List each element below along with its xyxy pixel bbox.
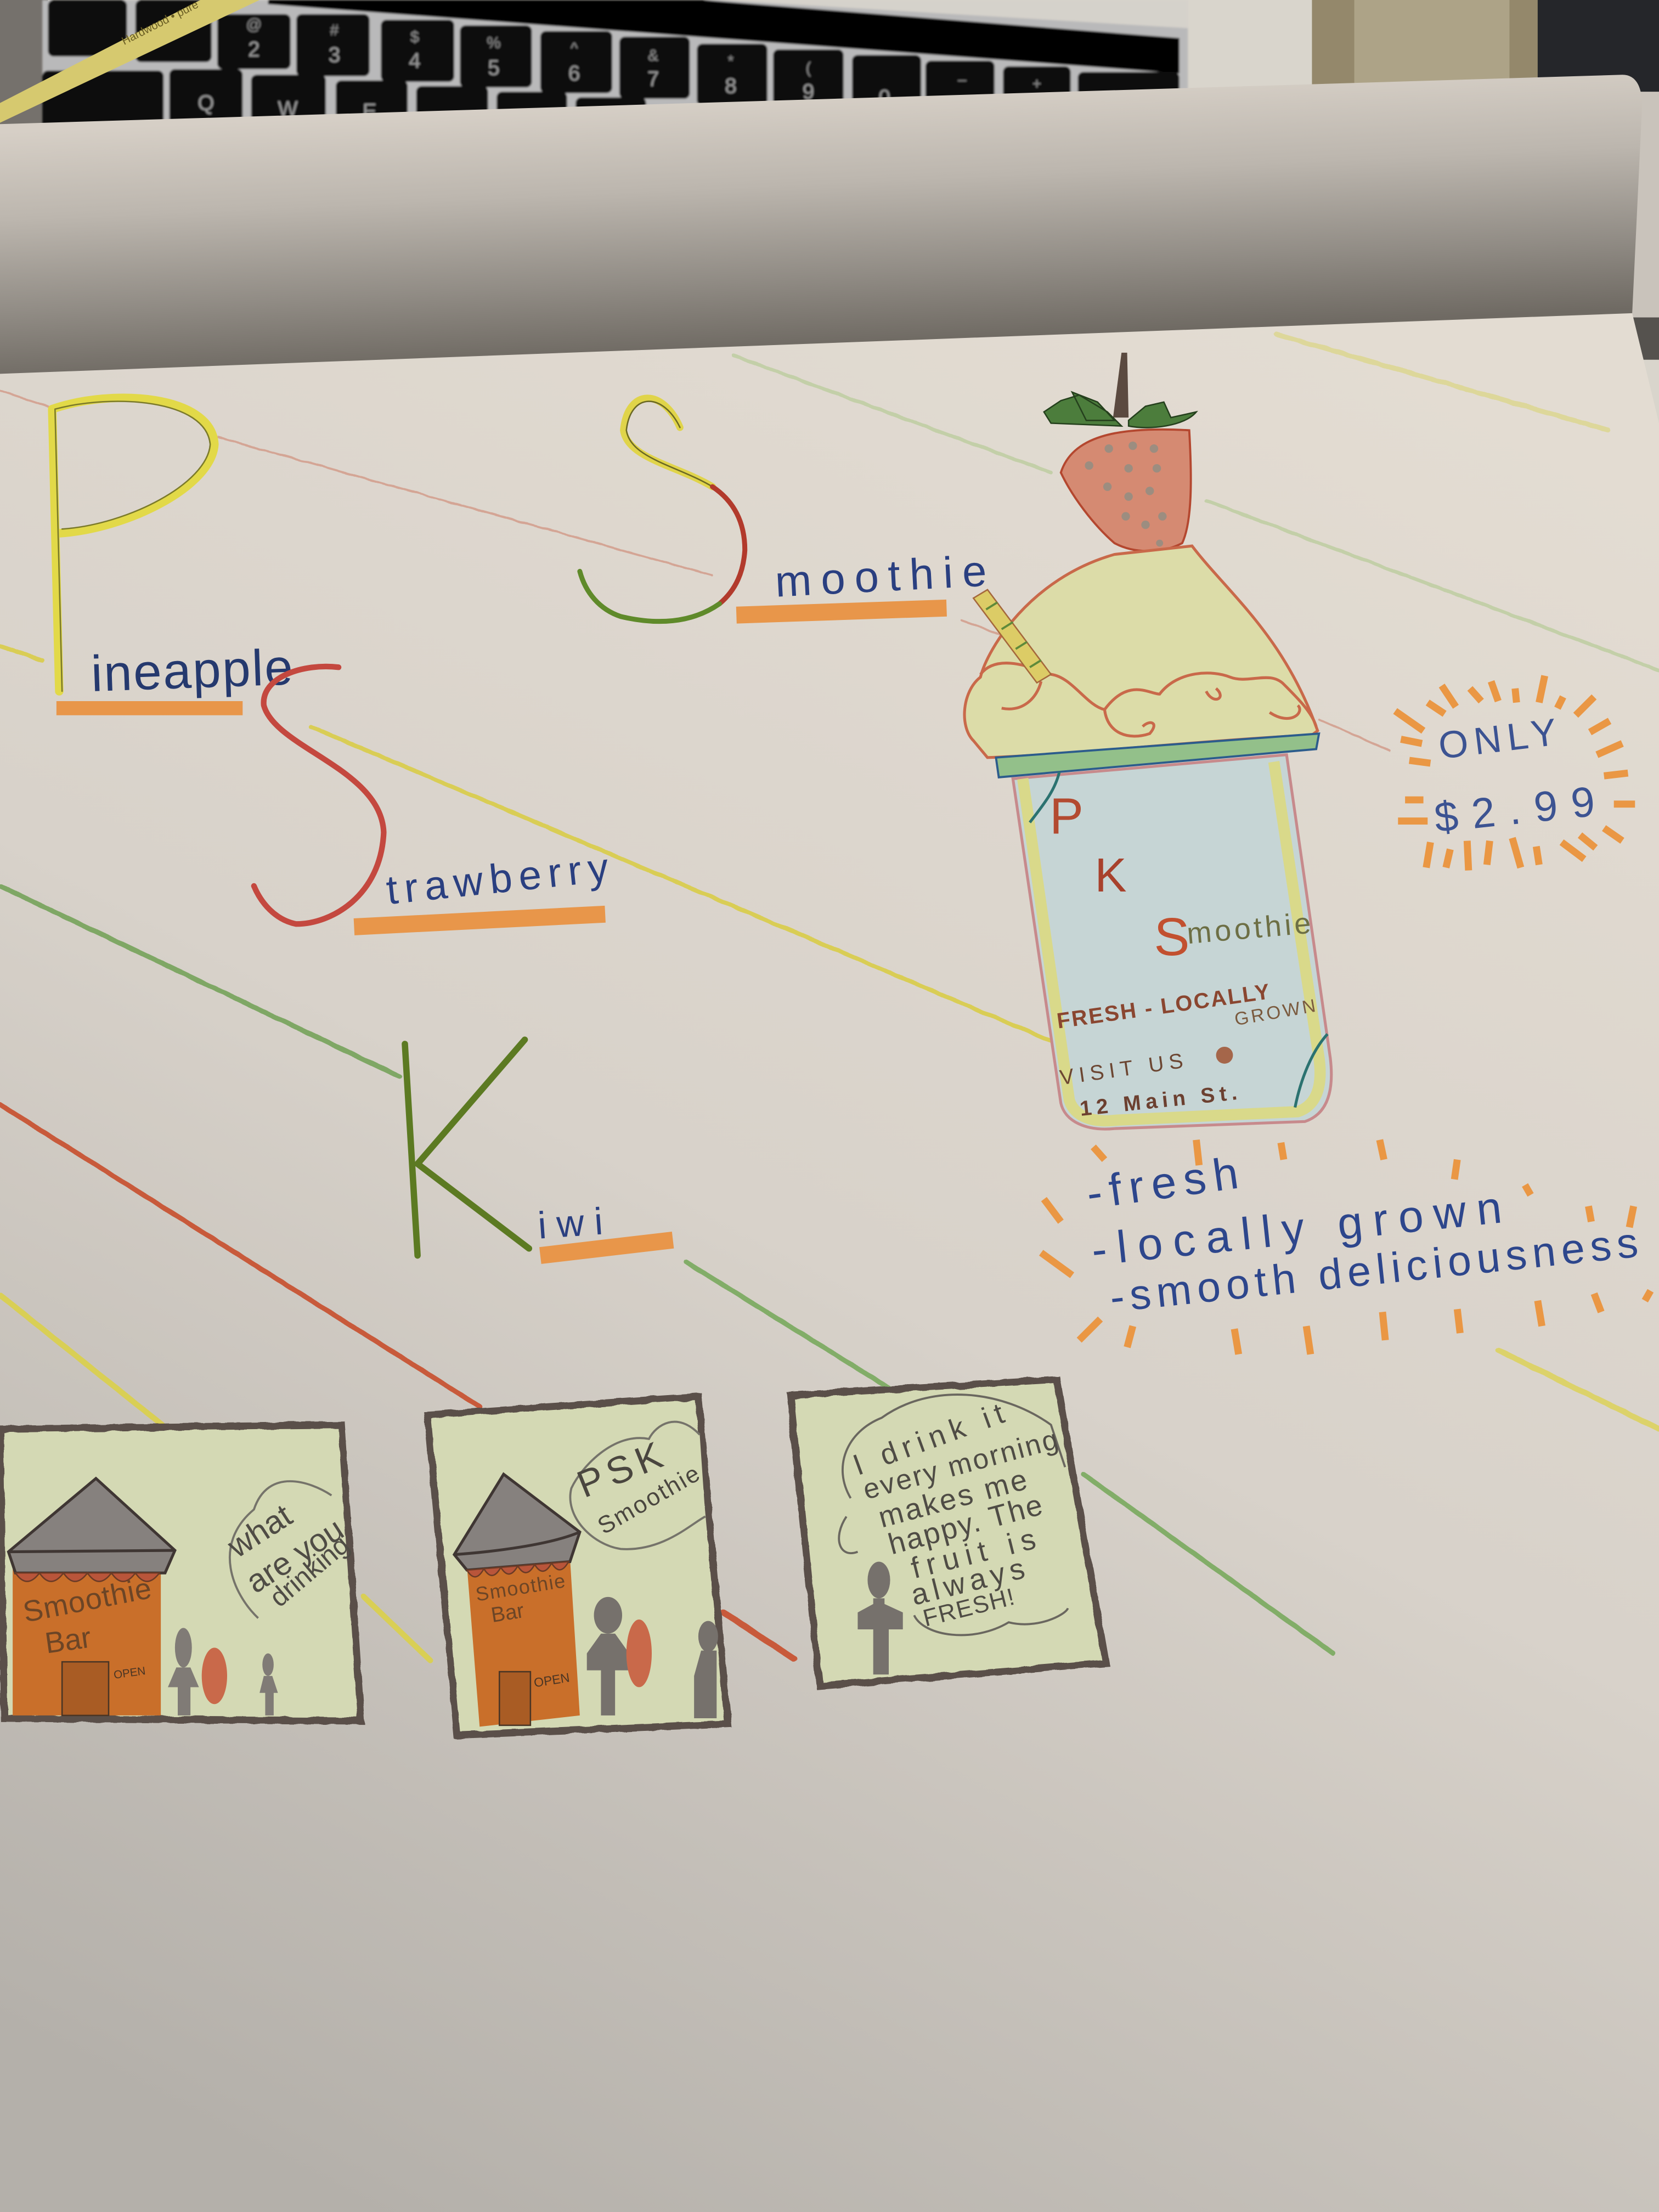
building [8, 1479, 175, 1716]
cup label letters: GROWN [1233, 996, 1317, 1030]
thought text: what [221, 1497, 298, 1565]
word: iwi: iwi [537, 1200, 604, 1247]
thought text Smoothie: Smoothie [593, 1460, 704, 1539]
feature list burst [1041, 1140, 1651, 1355]
laptop keyboard: 6 [568, 62, 580, 86]
laptop keyboard: + [1032, 75, 1041, 92]
rolled paper top [0, 75, 1642, 374]
orange underline [57, 706, 242, 711]
whipped cream swirl [980, 663, 1316, 736]
cup label letters [1049, 788, 1317, 1121]
building: Smoothie [20, 1572, 154, 1629]
list rays [1041, 1140, 1651, 1355]
letter P [52, 398, 215, 691]
orange underline [736, 608, 946, 615]
word: moothie: moothie [774, 546, 988, 606]
figure [857, 1562, 903, 1674]
laptop keyboard: & [648, 47, 658, 64]
speech text [849, 1397, 1061, 1632]
letter S [580, 398, 745, 622]
orange underline [540, 1240, 673, 1256]
thought text: drinking [264, 1530, 355, 1613]
heading letter S with word Smoothie [580, 398, 988, 622]
letter S [254, 667, 383, 924]
letter K [405, 1040, 529, 1256]
speech cloud [839, 1395, 1068, 1635]
price text amount: $2.99 [1432, 778, 1597, 842]
panel frame [427, 1397, 728, 1735]
word: trawberry: trawberry [384, 844, 611, 913]
laptop keyboard: # [330, 21, 339, 38]
cup body [1013, 755, 1331, 1129]
laptop keyboard: 2 [248, 38, 260, 61]
heading letter K with word Kiwi [405, 1040, 673, 1256]
figures [168, 1628, 278, 1716]
smoothie dome [964, 546, 1318, 758]
orange underline [354, 914, 605, 927]
laptop keyboard: ( [806, 59, 811, 77]
speech text: always [908, 1552, 1028, 1612]
laptop keyboard: E [363, 100, 377, 123]
laptop keyboard: W [278, 97, 298, 121]
background diagonal lines [0, 334, 1659, 1661]
laptop keyboard: ^ [571, 40, 578, 57]
cup label letters: S [1154, 907, 1190, 967]
speech text: FRESH! [920, 1583, 1017, 1632]
laptop keyboard: 9 [803, 80, 814, 104]
word: ineapple: ineapple [90, 638, 294, 702]
laptop keyboard: 8 [725, 75, 737, 98]
laptop keyboard: 7 [647, 67, 659, 91]
heading letter S with word Strawberry [254, 667, 611, 927]
comic panel 2 [427, 1397, 728, 1735]
speech text: happy. The [885, 1488, 1046, 1561]
laptop keyboard: – [958, 70, 967, 88]
figures [587, 1597, 718, 1718]
building: Bar [43, 1621, 93, 1660]
straw [973, 590, 1051, 683]
laptop keyboard: 5 [488, 56, 500, 80]
thought text: are you [239, 1510, 350, 1600]
strawberry [1044, 353, 1197, 551]
list item smooth deliciousness: -smooth deliciousness [1108, 1219, 1640, 1321]
laptop keyboard: * [728, 52, 734, 70]
list item locally grown: -locally grown [1089, 1182, 1504, 1275]
laptop keyboard: $ [410, 28, 419, 46]
burst rays [1395, 676, 1635, 871]
speech text: I drink it [849, 1397, 1008, 1482]
price burst [1395, 676, 1635, 871]
heading letter P with word Pineapple [52, 398, 294, 708]
thought text [221, 1497, 355, 1613]
cup rim [996, 733, 1319, 777]
cup label letters: moothie [1186, 907, 1312, 950]
laptop keyboard: 3 [329, 43, 340, 67]
cup label letters: VISIT US [1058, 1049, 1184, 1090]
building: Bar [489, 1599, 526, 1627]
cup label letters: 12 Main St. [1079, 1081, 1238, 1121]
cup label letters: K [1094, 848, 1127, 902]
building [454, 1474, 580, 1726]
building: OPEN [113, 1664, 146, 1681]
laptop keyboard: Q [198, 92, 214, 115]
thought cloud [230, 1481, 331, 1618]
laptop keyboard: % [487, 33, 501, 51]
laptop keyboard [42, 0, 1188, 145]
comic panel 3 [790, 1380, 1106, 1686]
building: Smoothie [474, 1569, 567, 1605]
cup inner yellow edge [1023, 762, 1320, 1121]
thought text PSK: PSK [571, 1431, 674, 1506]
laptop keyboard: @ [246, 15, 262, 33]
price text only: ONLY [1436, 710, 1559, 767]
panel frame [0, 1425, 361, 1721]
panel frame [790, 1380, 1106, 1686]
background desk [0, 0, 1659, 423]
thought cloud [570, 1422, 706, 1549]
speech text: fruit is [908, 1522, 1039, 1585]
comic panel 1 [0, 1425, 361, 1721]
speech text: every morning [860, 1423, 1061, 1505]
speech text: makes me [875, 1463, 1031, 1534]
laptop keyboard: 4 [409, 49, 421, 72]
list item fresh: -fresh [1084, 1148, 1242, 1219]
cup label letters: FRESH - LOCALLY [1056, 980, 1271, 1033]
cup label letters: P [1049, 788, 1084, 845]
cup highlights [1030, 772, 1328, 1108]
pencil [0, 0, 259, 123]
laptop keyboard: 0 [879, 86, 890, 109]
building: OPEN [533, 1670, 571, 1690]
smoothie cup illustration [964, 353, 1331, 1129]
